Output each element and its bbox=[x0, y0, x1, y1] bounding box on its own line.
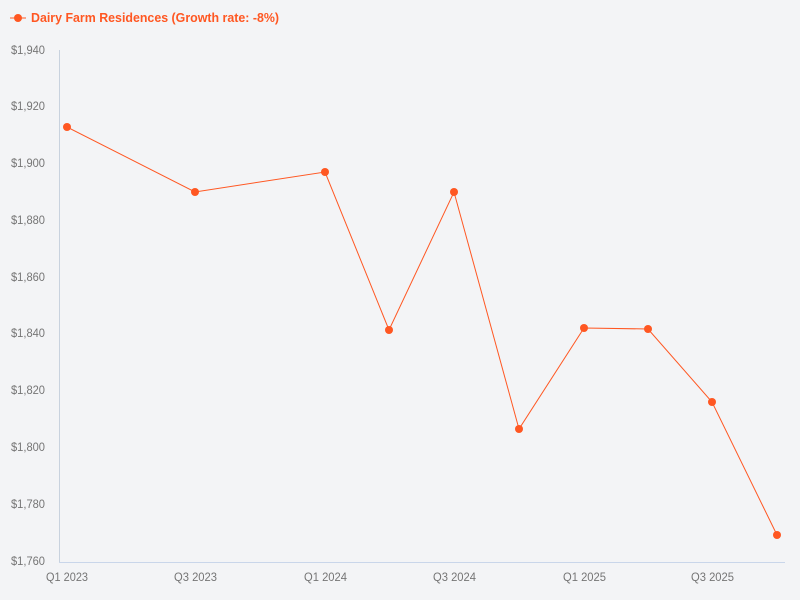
y axis labels: $1,920 bbox=[11, 101, 45, 113]
y axis labels: $1,800 bbox=[11, 442, 45, 454]
y axis labels: $1,820 bbox=[11, 385, 45, 397]
x axis labels: Q3 2023 bbox=[174, 572, 217, 584]
x axis labels: Q3 2025 bbox=[691, 572, 734, 584]
x axis labels bbox=[46, 572, 734, 584]
y axis labels: $1,860 bbox=[11, 272, 45, 284]
y axis labels: $1,880 bbox=[11, 215, 45, 227]
legend: Dairy Farm Residences (Growth rate: -8%) bbox=[31, 11, 279, 25]
y axis labels: $1,760 bbox=[11, 556, 45, 568]
x axis labels: Q1 2024 bbox=[304, 572, 348, 584]
data line bbox=[67, 127, 777, 535]
y axis labels: $1,940 bbox=[11, 45, 45, 57]
x axis labels: Q1 2023 bbox=[46, 572, 88, 584]
x axis labels: Q1 2025 bbox=[563, 572, 606, 584]
y axis labels: $1,840 bbox=[11, 328, 45, 340]
x axis labels: Q3 2024 bbox=[433, 572, 477, 584]
y axis labels: $1,900 bbox=[11, 158, 45, 170]
axes bbox=[59, 50, 785, 562]
y axis labels: $1,780 bbox=[11, 499, 45, 511]
data points bbox=[63, 123, 781, 539]
y axis labels bbox=[11, 45, 45, 568]
